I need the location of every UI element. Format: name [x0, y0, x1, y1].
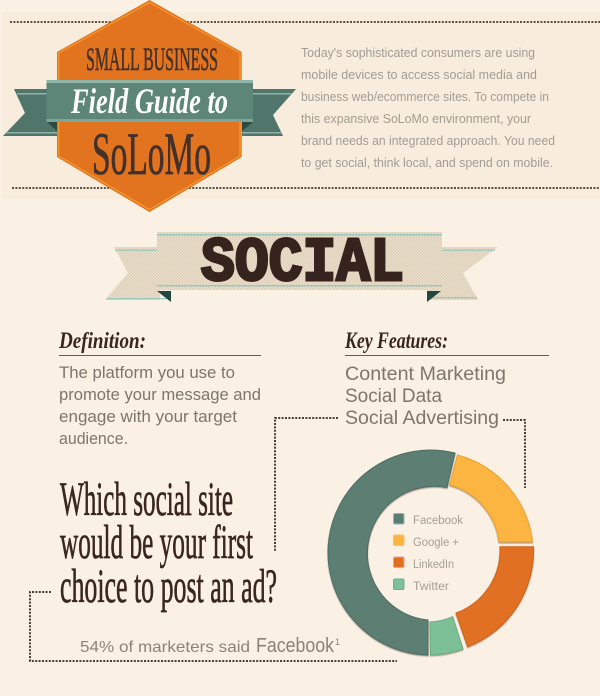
definition text [59, 364, 261, 448]
badge: hexagon logo [3, 0, 296, 212]
badge text: SoLoMo: SoLoMo [92, 121, 211, 187]
intro paragraph: Today's sophisticated consumers are using [301, 45, 535, 60]
banner band [157, 232, 442, 290]
intro paragraph [301, 45, 555, 170]
key features list: Social Advertising [345, 408, 499, 429]
ribbon tails [3, 89, 296, 136]
dotted connector: features to question [275, 418, 338, 551]
dotted connector: features to donut [503, 420, 525, 488]
segment: Twitter [430, 617, 463, 655]
dotted connector: question to donut [30, 592, 397, 661]
intro paragraph: mobile devices to access social media and [301, 67, 537, 82]
hexagon [57, 0, 242, 212]
legend item: Twitter: Twitter [413, 581, 449, 593]
statistic caption [80, 635, 340, 657]
block: definition [58, 328, 261, 448]
intro paragraph: this expansive SoLoMo environment, your [301, 111, 532, 126]
banner tails [105, 247, 498, 300]
key features list: Content Marketing [345, 364, 506, 385]
ribbon band [46, 80, 253, 122]
statistic caption: 54% of marketers said [80, 639, 250, 656]
segment: Google + [450, 455, 532, 542]
banner fold left [157, 291, 171, 302]
banner fold right [427, 291, 441, 302]
statistic caption: Facebook [256, 635, 335, 657]
intro paragraph: business web/ecommerce sites. To compete in [301, 89, 549, 104]
heading: SOCIAL: SOCIAL [201, 228, 404, 299]
segment: LinkedIn [456, 547, 534, 647]
definition text: promote your message and [59, 386, 261, 404]
panel: header [3, 12, 600, 199]
definition text: audience. [59, 430, 128, 448]
definition heading: Definition: [58, 328, 146, 353]
legend item: Facebook: Facebook [413, 515, 463, 527]
question heading: Which social site [60, 473, 233, 526]
question heading: would be your first [60, 516, 253, 569]
legend item: Google +: Google + [413, 537, 459, 549]
badge text: field guide to: Field Guide to [70, 81, 228, 121]
intro paragraph: to get social, think local, and spend on mobile. [301, 155, 553, 170]
intro paragraph: brand needs an integrated approach. You need [301, 133, 555, 148]
key features list [345, 364, 506, 429]
block: key features [344, 328, 549, 429]
legend item: LinkedIn: LinkedIn [413, 559, 454, 571]
segment: Facebook [328, 450, 455, 655]
badge: hexagon logo: SMALL BUSINESS [86, 42, 218, 78]
definition text: The platform you use to [59, 364, 235, 382]
donut chart [328, 450, 534, 655]
question heading [60, 473, 277, 613]
key features heading: Key Features: [344, 328, 448, 353]
legend [394, 514, 463, 593]
definition text: engage with your target [59, 408, 237, 426]
key features list: Social Data [345, 386, 442, 407]
statistic caption: 1 [335, 637, 340, 647]
banner: social [105, 228, 498, 302]
question heading: choice to post an ad? [60, 560, 277, 613]
